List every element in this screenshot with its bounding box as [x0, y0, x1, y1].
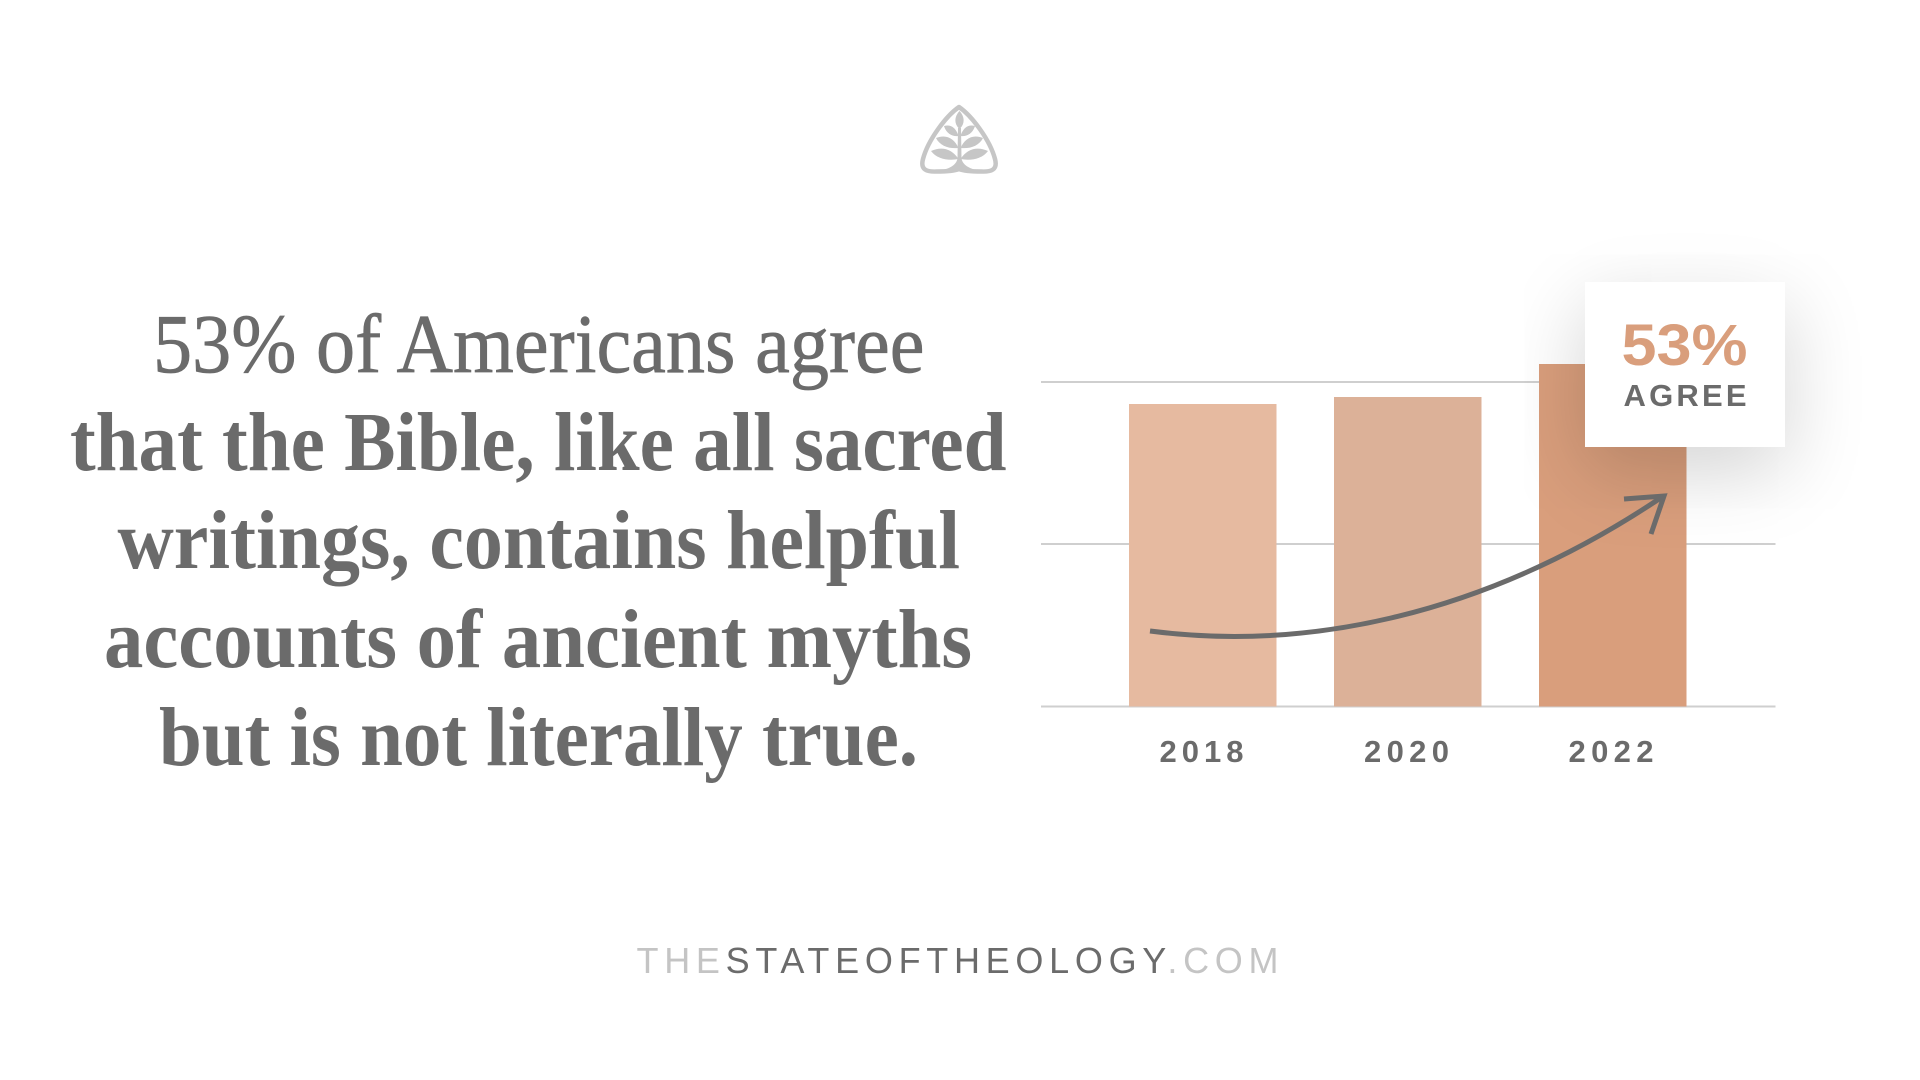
headline text	[70, 298, 1006, 784]
headline line 5: but is not literally true.	[159, 691, 918, 784]
callout label: AGREE	[1623, 378, 1746, 413]
bar 2020	[1334, 397, 1482, 706]
label 2018: 2018	[1160, 734, 1244, 769]
callout value: 53%	[1621, 313, 1747, 378]
headline line 3: writings, contains helpful	[118, 494, 960, 587]
footer: website url: THESTATEOFTHEOLOGY.COM	[636, 940, 1278, 981]
callout: 53% agree card	[1584, 282, 1785, 447]
arrow: upward trend	[1150, 493, 1668, 639]
headline line 2: that the Bible, like all sacred	[70, 396, 1006, 489]
bar chart	[1041, 364, 1776, 769]
headline line 4: accounts of ancient myths	[104, 593, 972, 686]
headline line 1: 53% of Americans agree	[153, 298, 924, 391]
bar 2022	[1539, 364, 1686, 706]
bar 2018	[1129, 404, 1276, 706]
label 2022: 2022	[1568, 734, 1654, 769]
label 2020: 2020	[1364, 734, 1449, 769]
icon: tree logo	[920, 104, 998, 174]
